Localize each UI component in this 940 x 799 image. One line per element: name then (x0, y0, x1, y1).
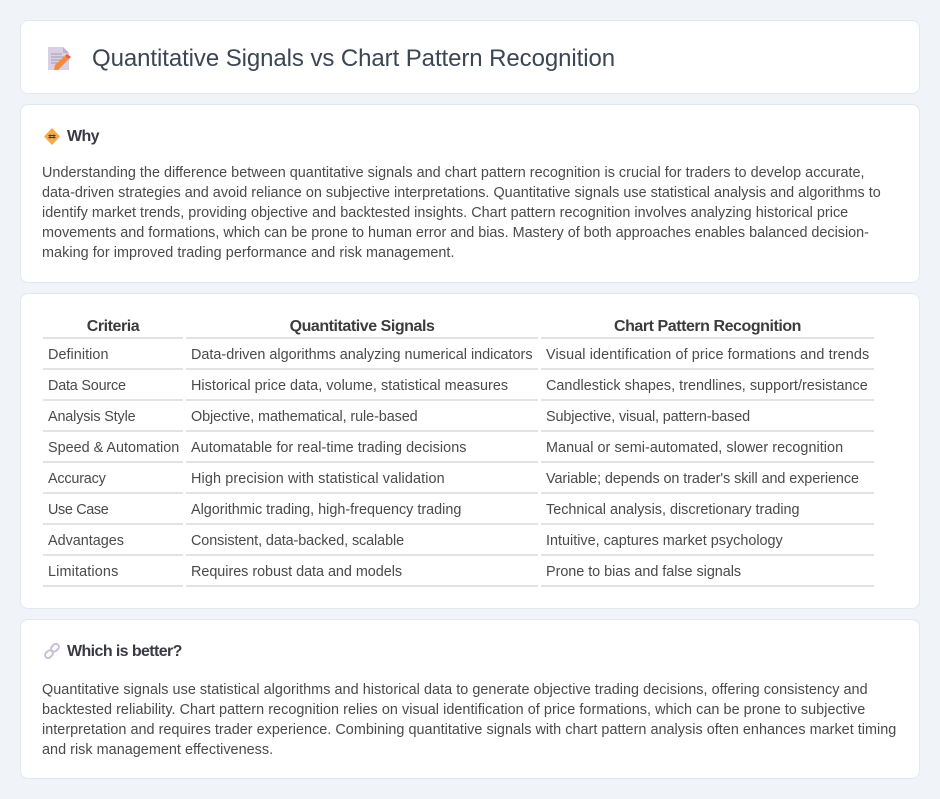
icon: document with pencil (48, 47, 71, 70)
icon: diamond sign (44, 128, 60, 145)
text: Accuracy (48, 471, 106, 487)
text: Quantitative Signals (290, 318, 434, 335)
text: backtested reliability. Chart pattern recognition relies on visual identification of price formations, which can be prone to subjective (42, 702, 865, 718)
text: Analysis Style (48, 409, 135, 425)
text: Historical price data, volume, statistical measures (191, 378, 508, 394)
icon: link (44, 643, 60, 659)
text: data-driven strategies and avoid reliance on subjective interpretations. Quantitative signals use statistical analysis and algorithms to (42, 185, 881, 201)
text: Data Source (48, 378, 126, 394)
panel: which is better (20, 619, 920, 779)
text: Data-driven algorithms analyzing numerical indicators (191, 347, 533, 363)
text: Prone to bias and false signals (546, 564, 741, 580)
text: Algorithmic trading, high-frequency trading (191, 502, 461, 518)
text: Requires robust data and models (191, 564, 402, 580)
text: Chart Pattern Recognition (614, 318, 801, 335)
text block: why (42, 165, 881, 261)
text: High precision with statistical validation (191, 471, 445, 487)
text: Variable; depends on trader's skill and experience (546, 471, 859, 487)
text: Automatable for real-time trading decisions (191, 440, 466, 456)
text: Advantages (48, 533, 124, 549)
text: Limitations (48, 564, 118, 580)
heading: why: Why (67, 128, 99, 145)
text: movements and formations, which can be prone to human error and bias. Mastery of both approaches enables balanced decision- (42, 225, 869, 241)
text: Objective, mathematical, rule-based (191, 409, 418, 425)
text: Understanding the difference between quantitative signals and chart pattern recognition is crucial for traders to develop accurate, (42, 165, 865, 181)
text: and risk management effectiveness. (42, 742, 273, 758)
text: Speed & Automation (48, 440, 179, 456)
table rows (43, 337, 874, 587)
panel: why (20, 104, 920, 283)
title: Quantitative Signals vs Chart Pattern Recognition (92, 45, 615, 72)
text: Use Case (48, 502, 108, 518)
text: Consistent, data-backed, scalable (191, 533, 404, 549)
panel: comparison table (20, 293, 920, 609)
text: Intuitive, captures market psychology (546, 533, 783, 549)
text: making for improved trading performance and risk management. (42, 245, 455, 261)
heading: which is better: Which is better? (67, 643, 182, 660)
text: Technical analysis, discretionary trading (546, 502, 800, 518)
text: Visual identification of price formations and trends (546, 347, 869, 363)
text: Quantitative signals use statistical algorithms and historical data to generate objective trading decisions, offering consistency and (42, 682, 868, 698)
text: interpretation and requires trader experience. Combining quantitative signals with chart pattern analysis often enhances market timing (42, 722, 896, 738)
text: Criteria (87, 318, 139, 335)
text: Definition (48, 347, 108, 363)
text: Manual or semi-automated, slower recognition (546, 440, 843, 456)
text block: which is better (42, 682, 896, 758)
text: Subjective, visual, pattern-based (546, 409, 750, 425)
text: identify market trends, providing objective and backtested insights. Chart pattern recognition involves analyzing historical price (42, 205, 848, 221)
table header (87, 318, 801, 335)
panel: title card (20, 20, 920, 94)
text: Candlestick shapes, trendlines, support/resistance (546, 378, 868, 394)
